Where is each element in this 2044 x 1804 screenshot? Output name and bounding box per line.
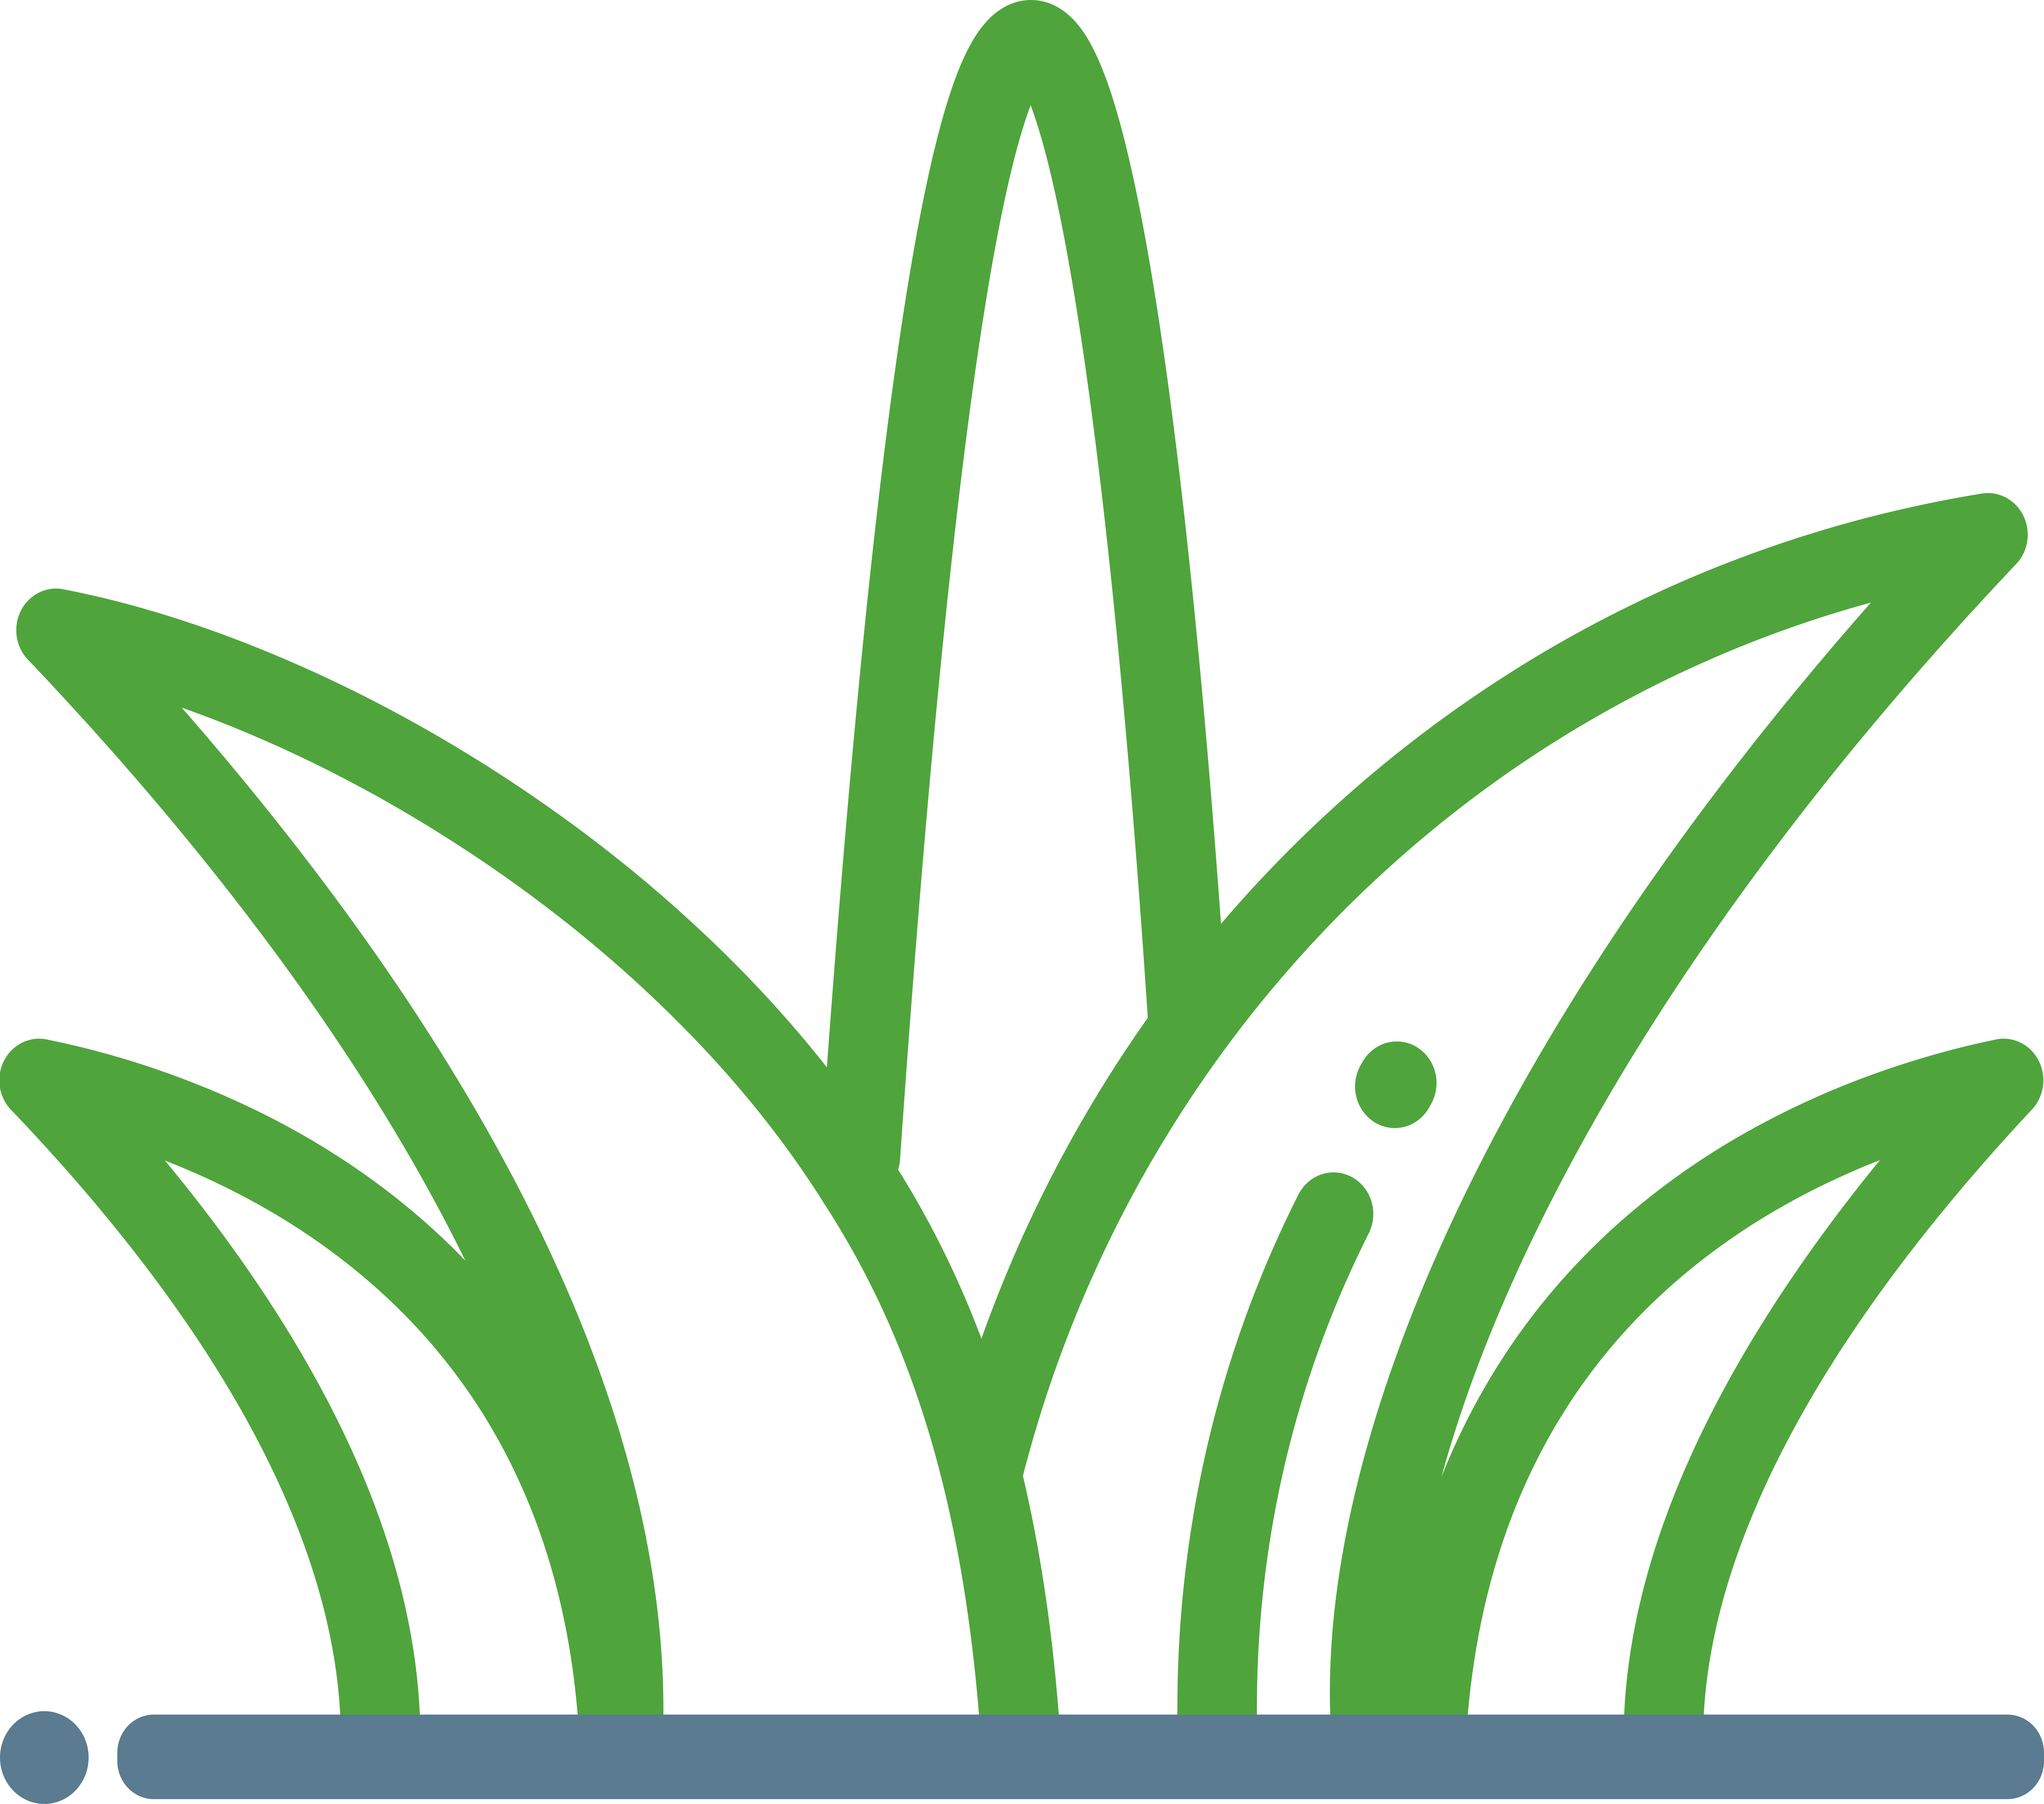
inner stem dot — [1395, 1083, 1397, 1087]
central leaf — [861, 42, 1188, 1157]
inner stem stroke — [1217, 1214, 1334, 1739]
left big leaf — [56, 630, 1021, 1739]
right small leaf — [1426, 1080, 2004, 1739]
left small leaf — [39, 1080, 619, 1739]
right big leaf — [984, 535, 1988, 1739]
ground bar — [117, 1714, 2044, 1799]
ground dot — [0, 1711, 89, 1804]
